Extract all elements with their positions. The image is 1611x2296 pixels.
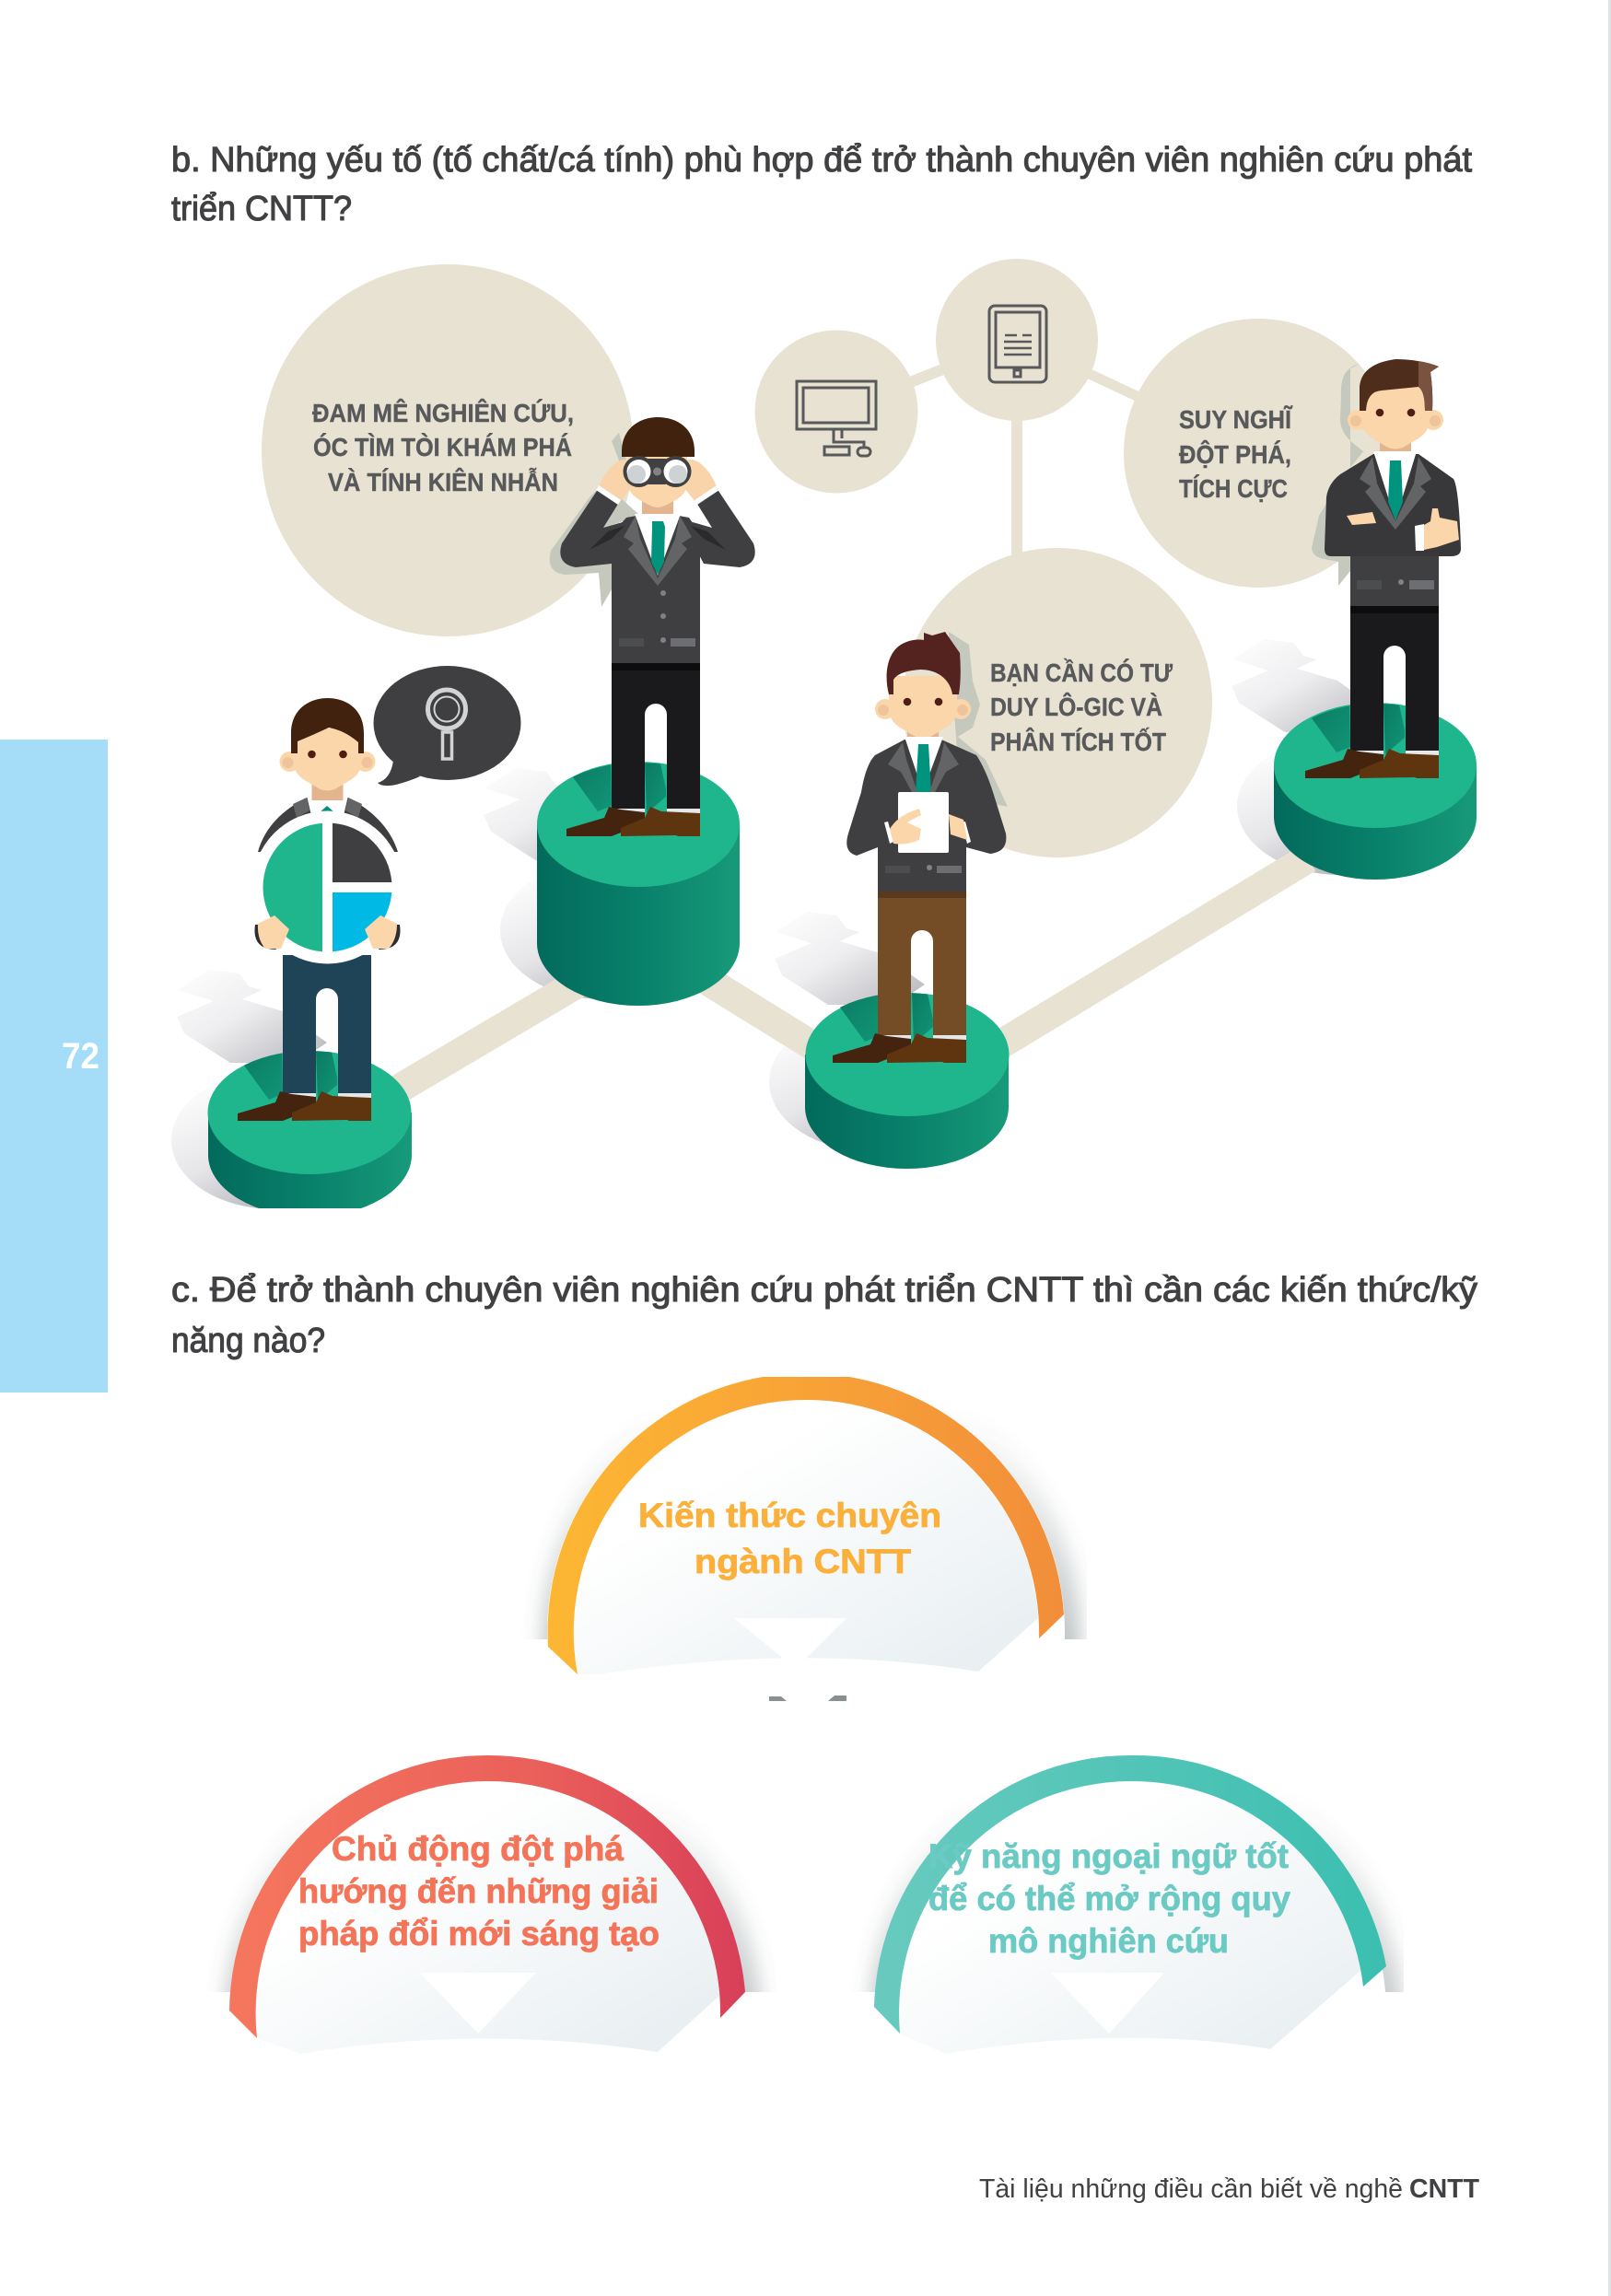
bubble: passion for research: ĐAM MÊ NGHIÊN CỨU, — [312, 399, 574, 427]
heading c: năng nào? — [171, 1322, 325, 1360]
bubble: passion for research: ÓC TÌM TÒI KHÁM PHÁ — [313, 433, 572, 461]
bubble: logical thinking: BẠN CẦN CÓ TƯ — [990, 658, 1173, 687]
heading b: b. Những yếu tố (tố chất/cá tính) phù hợp để trở thành chuyên viên nghiên cứu phát — [171, 141, 1472, 180]
illustration: career traits network — [171, 259, 1477, 1217]
heading c: c. Để trở thành chuyên viên nghiên cứu phát triển CNTT thì cần các kiến thức/kỹ — [171, 1271, 1477, 1310]
bubble: breakthrough thinking: SUY NGHĨ — [1179, 405, 1293, 434]
bubble: breakthrough thinking: ĐỘT PHÁ, — [1179, 439, 1291, 469]
platform 1 — [208, 1048, 412, 1217]
man 4 with crossed arms — [1305, 359, 1461, 778]
platform 3 — [805, 990, 1010, 1169]
bubble: breakthrough thinking — [1124, 319, 1393, 588]
bubble: monitor icon — [755, 330, 917, 494]
bubble: tablet icon — [936, 259, 1098, 421]
platform 4 — [1274, 701, 1477, 880]
bubble: passion for research: VÀ TÍNH KIÊN NHẪN — [328, 468, 558, 496]
ground shadows — [171, 639, 1443, 1209]
arch: proactive breakthrough — [225, 1745, 761, 2281]
arch: foreign language skills — [870, 1747, 1402, 2279]
side bar with page number — [0, 740, 108, 1393]
arch: proactive breakthrough: hướng đến những giải — [298, 1872, 659, 1910]
arch: professional IT knowledge: Kiến thức chuyên — [638, 1497, 941, 1534]
bubble: breakthrough thinking: TÍCH CỰC — [1179, 474, 1288, 503]
bubble: passion for research — [262, 264, 634, 636]
road paths between platforms — [387, 858, 1308, 1096]
side bar with page number: 72 — [62, 1036, 99, 1077]
arch: foreign language skills: mô nghiên cứu — [988, 1922, 1229, 1960]
connector lines between bubbles — [910, 365, 1138, 554]
heading c — [171, 1271, 1477, 1360]
speech bubble with magnifier icon — [374, 666, 521, 786]
arch: foreign language skills: Kỹ năng ngoại ngữ tốt — [928, 1837, 1289, 1875]
heading b — [171, 141, 1472, 228]
pie chart — [263, 823, 391, 951]
man 2 with binoculars — [550, 417, 755, 836]
man 1 holding pie chart — [238, 698, 403, 1121]
arch: proactive breakthrough: Chủ động đột phá — [332, 1830, 624, 1868]
heading b: triển CNTT? — [171, 190, 352, 228]
arch: foreign language skills: để có thể mở rộng quy — [928, 1880, 1290, 1917]
arch: professional IT knowledge — [543, 1363, 1080, 1901]
arch: professional IT knowledge: ngành CNTT — [695, 1543, 911, 1580]
footer: CNTT — [1409, 2174, 1479, 2204]
bubble: logical thinking: DUY LÔ-GIC VÀ — [990, 692, 1162, 721]
footer: Tài liệu những điều cần biết về nghề — [979, 2174, 1403, 2204]
platform 2 — [537, 760, 740, 1006]
binoculars — [623, 456, 691, 487]
arch: proactive breakthrough: pháp đổi mới sáng tạo — [298, 1915, 660, 1952]
bubble: logical thinking — [903, 548, 1212, 857]
bubble: logical thinking: PHÂN TÍCH TỐT — [990, 727, 1166, 756]
man 3 with tablet — [833, 632, 1008, 1063]
